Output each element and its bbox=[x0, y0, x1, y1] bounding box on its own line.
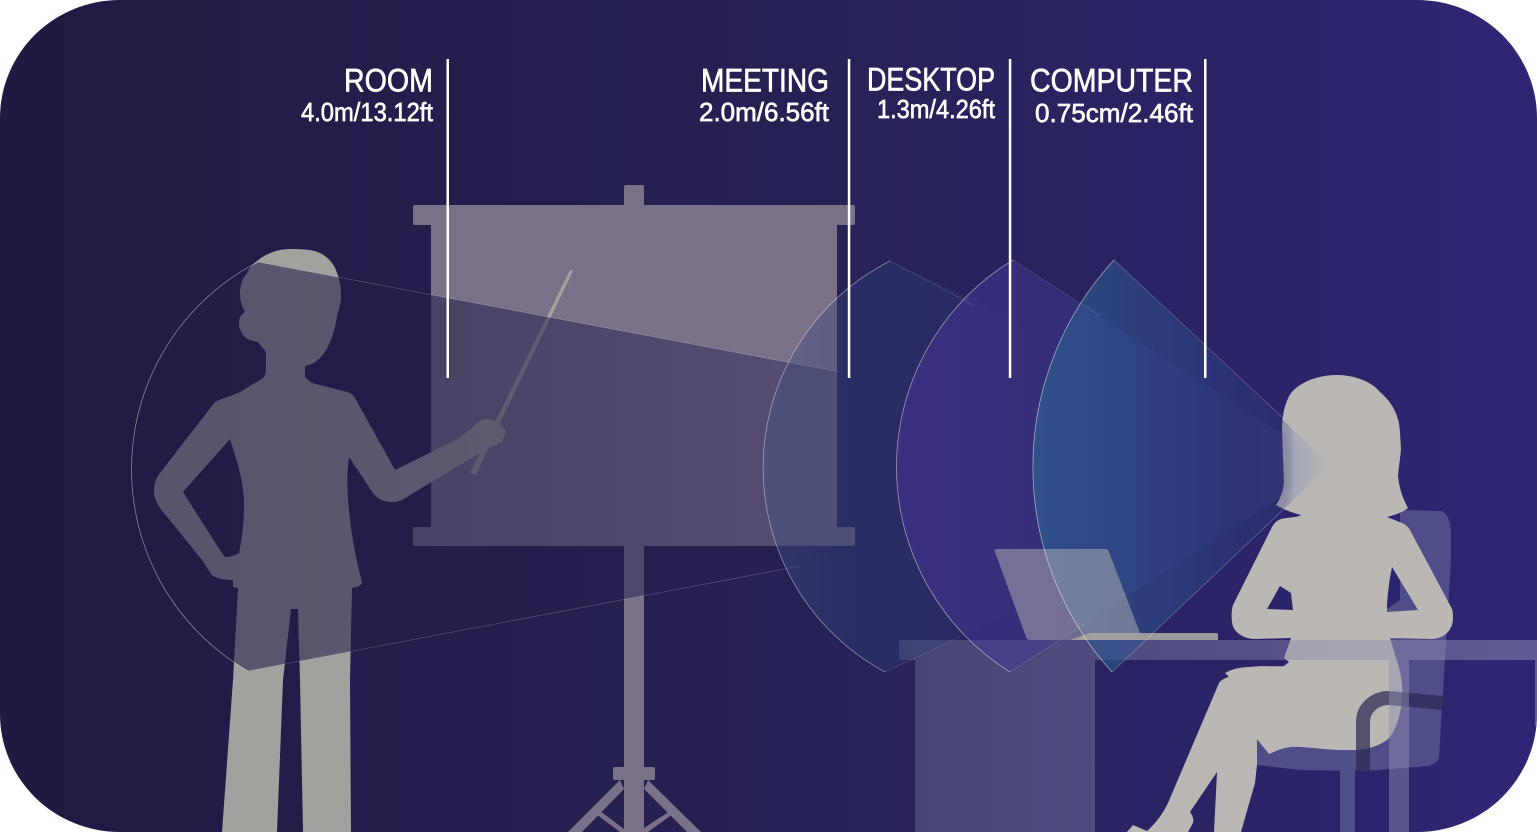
seated woman silhouette bbox=[1127, 375, 1453, 832]
hand pointer bbox=[470, 270, 573, 475]
chair armrest bbox=[1363, 698, 1443, 771]
desktop viewing cone bbox=[896, 260, 1330, 672]
label: room bbox=[301, 62, 434, 127]
label: desktop bbox=[867, 62, 996, 124]
computer viewing cone bbox=[1033, 260, 1330, 672]
room cone outline bbox=[132, 262, 840, 671]
label: room: ROOM bbox=[344, 62, 433, 98]
label: computer: COMPUTER bbox=[1030, 62, 1193, 98]
laptop bbox=[995, 549, 1218, 640]
label: desktop: DESKTOP bbox=[867, 62, 995, 98]
distance marker lines bbox=[446, 59, 1206, 378]
label: meeting bbox=[699, 62, 830, 127]
desk bbox=[899, 640, 1537, 832]
label: meeting: MEETING bbox=[701, 62, 829, 98]
room viewing cone bbox=[132, 262, 1330, 671]
label: meeting: 2.0m/6.56ft bbox=[699, 97, 830, 127]
projector screen on tripod bbox=[413, 185, 855, 832]
label: computer: 0.75cm/2.46ft bbox=[1035, 98, 1194, 128]
presenter silhouette bbox=[154, 249, 506, 832]
meeting viewing cone bbox=[763, 261, 1330, 672]
label: computer bbox=[1030, 62, 1194, 128]
label: desktop: 1.3m/4.26ft bbox=[877, 94, 996, 124]
label: room: 4.0m/13.12ft bbox=[301, 97, 434, 127]
office chair bbox=[1255, 510, 1451, 832]
cone outlines bbox=[763, 260, 1285, 672]
